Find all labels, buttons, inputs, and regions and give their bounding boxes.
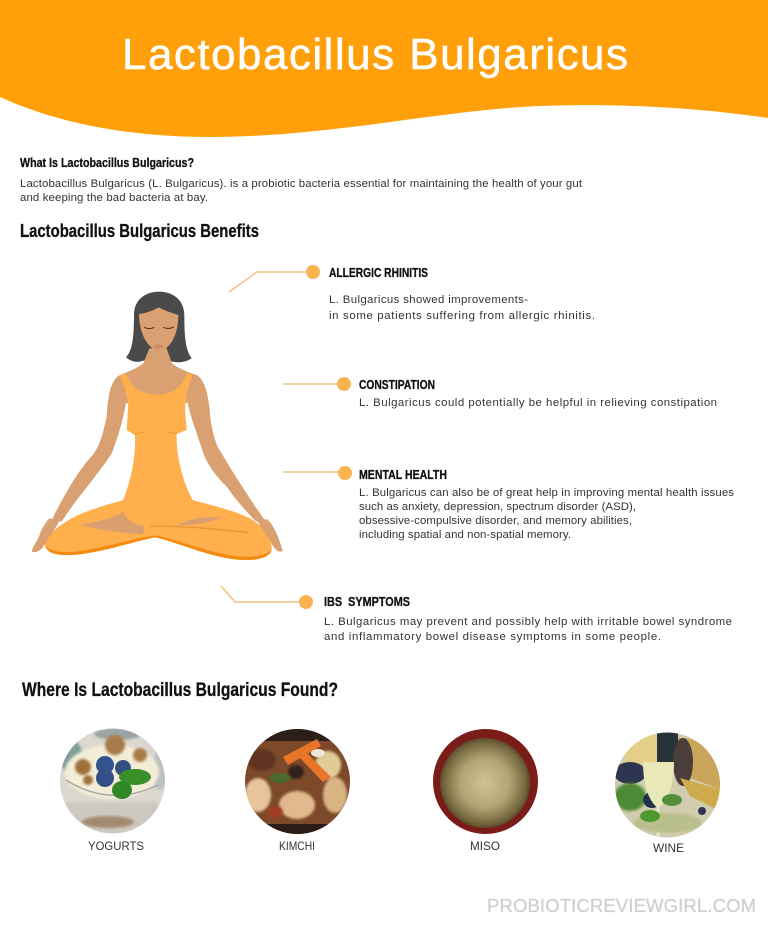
callout: allergic rhinitis bbox=[229, 265, 595, 322]
label: MISO bbox=[470, 839, 500, 853]
connector line bbox=[221, 586, 305, 602]
food: wine bbox=[614, 732, 722, 855]
body: including spatial and non-spatial memory. bbox=[359, 529, 571, 541]
title: Lactobacillus Bulgaricus bbox=[122, 30, 628, 79]
miso bowl bbox=[433, 729, 538, 834]
illustration: meditating woman bbox=[32, 292, 283, 560]
dot bbox=[338, 466, 352, 480]
heading: MENTAL HEALTH bbox=[359, 467, 447, 482]
left arm bbox=[52, 375, 127, 522]
heading: IBS SYMPTOMS bbox=[324, 594, 410, 609]
left hand bbox=[32, 518, 59, 552]
body bbox=[324, 616, 732, 643]
body: such as anxiety, depression, spectrum disorder (ASD), bbox=[359, 501, 636, 513]
body bbox=[359, 487, 734, 541]
body: L. Bulgaricus could potentially be helpful in relieving constipation bbox=[359, 397, 717, 409]
label: YOGURTS bbox=[88, 839, 144, 853]
connector line bbox=[283, 471, 345, 473]
kimchi photo bbox=[245, 729, 351, 835]
body: in some patients suffering from allergic rhinitis. bbox=[329, 310, 595, 322]
heading: ALLERGIC RHINITIS bbox=[329, 265, 428, 280]
dot bbox=[337, 377, 351, 391]
found heading: Where Is Lactobacillus Bulgaricus Found? bbox=[22, 680, 338, 701]
face bbox=[139, 307, 178, 352]
right foot bbox=[177, 517, 221, 525]
neck and chest bbox=[120, 348, 197, 403]
connector line bbox=[229, 272, 312, 292]
header banner bbox=[0, 0, 768, 137]
right arm bbox=[187, 375, 265, 522]
right hand bbox=[257, 519, 283, 552]
eyes bbox=[144, 327, 174, 329]
wine photo bbox=[614, 732, 722, 838]
body: L. Bulgaricus may prevent and possibly help with irritable bowel syndrome bbox=[324, 616, 732, 628]
callout: mental health bbox=[283, 466, 734, 541]
body bbox=[329, 294, 595, 322]
legs bbox=[45, 500, 272, 559]
food: yogurts bbox=[58, 728, 168, 853]
body: L. Bulgaricus showed improvements- bbox=[329, 294, 528, 306]
leg shadow bbox=[45, 535, 272, 560]
body: and inflammatory bowel disease symptoms in some people. bbox=[324, 631, 661, 643]
left foot bbox=[80, 512, 144, 534]
body: L. Bulgaricus can also be of great help in improving mental health issues bbox=[359, 487, 734, 499]
heading: CONSTIPATION bbox=[359, 377, 435, 392]
label: KIMCHI bbox=[279, 839, 315, 853]
body: obsessive-compulsive disorder, and memory abilities, bbox=[359, 515, 632, 527]
dot bbox=[306, 265, 320, 279]
watermark: PROBIOTICREVIEWGIRL.COM bbox=[487, 895, 756, 916]
connector line bbox=[283, 383, 344, 385]
dress torso bbox=[120, 373, 194, 526]
dot bbox=[299, 595, 313, 609]
benefits heading: Lactobacillus Bulgaricus Benefits bbox=[20, 221, 259, 241]
lips bbox=[154, 344, 163, 348]
folds bbox=[135, 432, 248, 533]
intro text: Lactobacillus Bulgaricus (L. Bulgaricus). is a probiotic bacteria essential for maintaining the health of your gut bbox=[20, 178, 583, 190]
intro text bbox=[20, 178, 583, 204]
label: WINE bbox=[653, 841, 684, 855]
callout: constipation bbox=[283, 377, 717, 409]
callout: IBS symptoms bbox=[221, 586, 732, 643]
food: kimchi bbox=[245, 729, 351, 853]
food: miso bbox=[433, 729, 538, 853]
yogurt photo bbox=[58, 728, 168, 834]
intro text: and keeping the bad bacteria at bay. bbox=[20, 192, 208, 204]
intro heading: What Is Lactobacillus Bulgaricus? bbox=[20, 155, 194, 170]
hair bbox=[126, 292, 192, 362]
